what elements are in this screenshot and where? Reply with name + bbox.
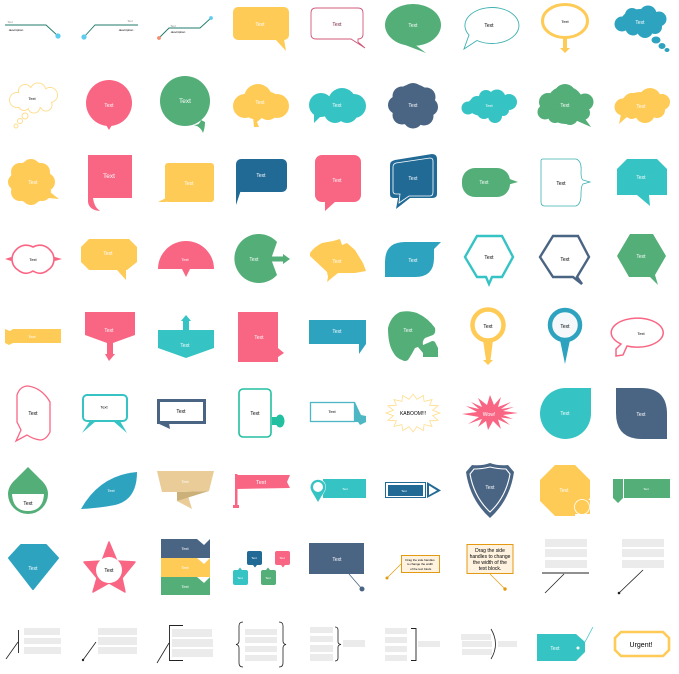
list with right brace <box>310 627 365 661</box>
yellow ginkgo callout <box>310 239 366 282</box>
teal outlined rectangle with arrow <box>310 402 366 425</box>
dark blue rounded callout: Text <box>256 173 266 179</box>
green circle with arrow <box>234 234 290 283</box>
teal chamfered callout: Text <box>636 175 646 181</box>
pink outlined oval callout <box>611 318 663 356</box>
orange large note callout: the width of the <box>473 560 507 566</box>
line callout right-down <box>5 20 61 39</box>
pink outlined oval callout: Text <box>637 331 646 336</box>
teal cloud callout: Text <box>332 103 342 109</box>
navy rectangle with pin line: Text <box>332 557 342 563</box>
orange small note callout: Drag the side handles <box>405 558 435 562</box>
list with pointer <box>82 628 137 661</box>
yellow cloud callout right: Text <box>636 104 646 110</box>
line callout two ends: Text <box>170 24 176 28</box>
orange small note callout: to change the width <box>407 562 433 566</box>
dark blue arrow banner <box>386 482 441 498</box>
list with vertical line <box>6 628 61 659</box>
four small callouts <box>233 551 290 585</box>
teal hexagon callout <box>465 236 513 284</box>
blue diamond <box>9 545 58 589</box>
teal price tag <box>537 627 593 661</box>
stacked three color list: Text <box>181 584 190 589</box>
green hexagon callout <box>617 234 666 285</box>
navy rectangle with pin line <box>309 543 364 592</box>
teal cloud callout <box>309 88 366 123</box>
blue rectangle with tail: Text <box>332 329 342 335</box>
yellow octagon with circle: Text <box>559 488 569 494</box>
green blob callout <box>388 311 438 361</box>
green outlined phone callout: Text <box>250 411 260 417</box>
pink outlined blob callout: Text <box>28 411 38 417</box>
navy flower cloud callout <box>388 83 438 128</box>
stacked three color list <box>161 539 210 595</box>
yellow pin callout: Text <box>483 324 493 330</box>
blue thought cloud <box>614 6 670 52</box>
yellow cloud callout: Text <box>255 100 265 106</box>
teal outlined callout: Text <box>556 181 566 187</box>
teal map pin banner: Text <box>342 487 348 491</box>
teal outlined oval callout: Text <box>484 23 494 29</box>
yellow flower callout <box>8 159 59 205</box>
kaboom starburst <box>386 394 440 432</box>
green cloud callout: Text <box>560 103 570 109</box>
yellow rounded callout: Text <box>255 22 265 28</box>
navy shield: Text <box>485 485 495 491</box>
pink circle callout: Text <box>104 103 114 109</box>
orange small note callout: of the text block. <box>410 567 432 571</box>
pink flag: Text <box>256 480 267 486</box>
green circle callout: Text <box>179 98 191 105</box>
urgent octagon: Urgent! <box>630 642 653 649</box>
four small callouts: Text <box>265 576 271 580</box>
yellow outlined thought cloud <box>10 83 58 128</box>
four small callouts: Text <box>279 556 285 560</box>
blue thought cloud: Text <box>635 20 645 26</box>
pink half circle callout: Text <box>181 257 190 262</box>
dark blue arrow banner: Text <box>401 489 407 493</box>
green circle with arrow: Text <box>249 257 259 263</box>
yellow cloud callout <box>233 84 289 127</box>
list with square bracket <box>157 626 213 663</box>
yellow ring callout with arrow <box>542 4 588 53</box>
blue rectangle with tail <box>309 320 366 354</box>
teal small cloud callout <box>462 90 517 123</box>
dark blue rounded callout <box>236 159 287 205</box>
green banner with tab: Text <box>643 487 649 491</box>
teal two tail callout <box>82 395 127 433</box>
blue pin callout <box>550 310 580 364</box>
navy framed callout: Text <box>176 409 186 415</box>
line callout right-down: Text <box>7 20 13 24</box>
teal two tail callout: Text <box>100 404 109 410</box>
navy flower cloud callout: Text <box>408 103 418 109</box>
four small callouts: Text <box>251 556 257 560</box>
teal hexagon callout: Text <box>484 255 494 261</box>
yellow outlined thought cloud: Text <box>28 96 37 101</box>
line callout left-down: Text <box>127 19 133 23</box>
tan ribbon: Text <box>181 479 190 484</box>
green cloud callout <box>538 84 594 127</box>
yellow octagon callout <box>81 239 137 280</box>
orange large note callout: handles to change <box>470 554 511 560</box>
pink rounded callout with tail <box>315 155 361 211</box>
yellow callout with left tail: Text <box>184 181 194 187</box>
green banner with tab <box>613 479 670 503</box>
green drop <box>8 467 48 514</box>
blue leaf shape <box>81 472 137 509</box>
pink circle callout <box>86 80 132 130</box>
blue pin callout: Text <box>560 324 570 330</box>
teal outlined rectangle with arrow: Text <box>328 409 337 414</box>
teal price tag: Text <box>550 646 560 652</box>
pink rectangle with side tab: Text <box>254 335 264 341</box>
green drop: Text <box>23 501 33 507</box>
line callout two ends <box>157 16 213 40</box>
orange large note callout <box>467 544 513 591</box>
navy framed callout <box>157 400 204 429</box>
pink star with circle <box>84 542 135 592</box>
yellow octagon callout: Text <box>103 251 113 257</box>
line callout right-down: description <box>9 28 24 32</box>
blue leaf callout: Text <box>408 258 418 264</box>
line callout left-down: description <box>119 28 134 32</box>
green oval callout <box>385 4 441 53</box>
blue diamond: Text <box>28 566 38 572</box>
list with parenthesis <box>461 629 517 659</box>
green pill callout: Text <box>479 180 489 186</box>
gray list with underline <box>542 539 589 593</box>
pink outlined double lobe callout: Text <box>29 257 38 262</box>
yellow notched banner <box>5 329 61 345</box>
yellow ring callout with arrow: Text <box>561 19 570 24</box>
yellow notched banner: Text <box>28 334 37 339</box>
list with right bracket <box>385 628 440 661</box>
urgent octagon <box>615 632 669 656</box>
teal map pin banner <box>310 479 366 503</box>
stacked three color list: Text <box>181 546 190 551</box>
green oval callout: Text <box>408 23 418 29</box>
teal outlined callout <box>541 159 590 206</box>
blue leaf callout <box>385 242 441 277</box>
navy shield <box>466 463 514 518</box>
yellow octagon with circle <box>540 465 591 517</box>
teal teardrop <box>540 388 591 439</box>
teal arrow callout up: Text <box>180 343 190 349</box>
orange small note callout <box>386 556 440 580</box>
pink star with circle: Text <box>104 568 114 574</box>
kaboom starburst: KABOOM!!! <box>400 411 426 417</box>
pink square callout with curved tail <box>88 155 132 211</box>
navy leaf <box>616 388 667 439</box>
pink outlined blob callout <box>16 386 50 441</box>
pink outlined callout: Text <box>332 22 342 28</box>
pink outlined double lobe callout <box>5 245 62 273</box>
pink arrow callout down: Text <box>104 328 114 334</box>
navy hexagon callout <box>540 236 589 284</box>
stacked three color list: Text <box>181 565 190 570</box>
navy hexagon callout: Text <box>560 257 570 263</box>
wow starburst: Wow! <box>483 412 495 418</box>
navy leaf: Text <box>636 412 646 418</box>
yellow ginkgo callout: Text <box>332 259 342 265</box>
pink arrow callout down <box>85 312 135 361</box>
line callout two ends: description <box>171 30 186 34</box>
green circle callout <box>160 76 210 133</box>
pink flag <box>233 474 290 508</box>
teal chamfered callout <box>617 159 667 206</box>
teal teardrop: Text <box>560 411 570 417</box>
line callout left-down <box>81 19 138 40</box>
green hexagon callout: Text <box>636 254 646 260</box>
yellow flower callout: Text <box>28 180 38 186</box>
gray list with dotted pointer <box>618 539 664 594</box>
yellow rounded callout <box>233 7 289 51</box>
green blob callout: Text <box>403 328 413 334</box>
pink rectangle with side tab <box>238 312 284 362</box>
yellow cloud callout right <box>614 88 670 124</box>
pink outlined callout <box>311 8 365 48</box>
list with curly braces <box>236 622 286 667</box>
green pill callout <box>462 168 518 197</box>
pink half circle callout <box>158 241 214 277</box>
teal small cloud callout: Text <box>485 103 494 108</box>
four small callouts: Text <box>237 576 243 580</box>
teal arrow callout up <box>158 315 214 358</box>
green outlined phone callout <box>239 389 284 437</box>
yellow pin callout <box>472 310 504 365</box>
tan ribbon <box>157 471 214 509</box>
dark blue tilted callout: Text <box>408 176 418 182</box>
pink rounded callout with tail: Text <box>332 178 342 184</box>
orange large note callout: text block. <box>479 566 501 572</box>
orange large note callout: Drag the side <box>475 548 505 554</box>
blue leaf shape: Text <box>107 488 116 493</box>
teal outlined oval callout <box>464 8 519 49</box>
dark blue tilted callout <box>390 154 437 209</box>
pink square callout with curved tail: Text <box>103 173 115 180</box>
wow starburst <box>462 395 518 430</box>
yellow callout with left tail <box>158 163 214 202</box>
